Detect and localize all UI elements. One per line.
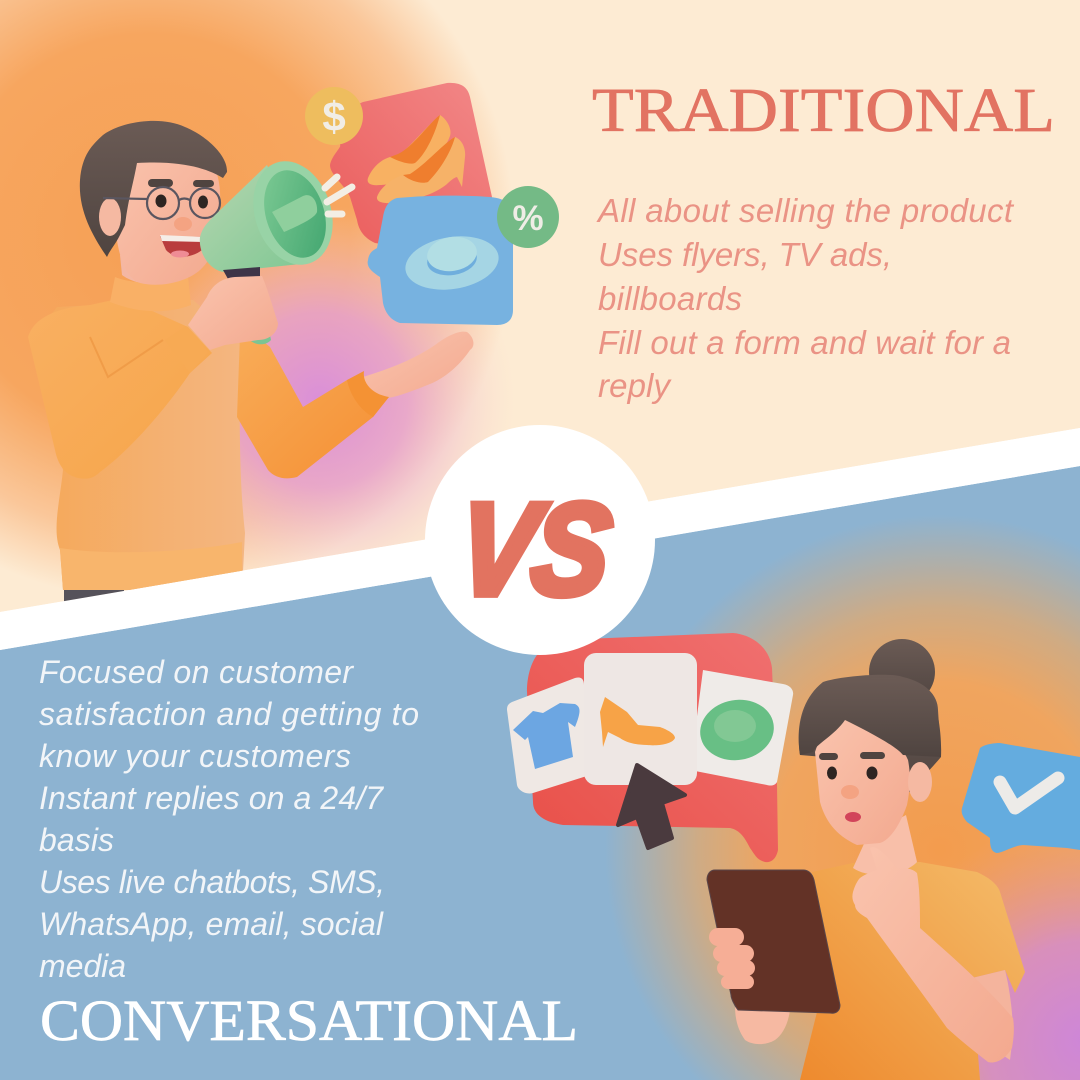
megaphone: handle (251, 336, 271, 344)
icon: blue hat card (368, 196, 513, 325)
man: sweater cuff (165, 326, 208, 373)
text block: traditional points: billboards (598, 280, 742, 317)
icon: cursor arrow (618, 765, 685, 848)
megaphone: rim (254, 161, 333, 265)
icon: orange heel one (368, 115, 451, 185)
woman: ear (908, 762, 932, 802)
icon: green hat (695, 694, 779, 766)
icon: megaphone sound lines (325, 177, 352, 214)
icon: blue check bubble (962, 743, 1080, 853)
text block: conversational points: Instant replies on a 24/7 (39, 780, 384, 816)
woman: eyes (827, 766, 878, 780)
megaphone: inner (264, 170, 326, 258)
megaphone: cone (200, 165, 296, 272)
woman: upper arm (972, 970, 1013, 1060)
man: ear (99, 198, 121, 236)
man: trousers (64, 590, 124, 602)
illustration: woman with tablet (707, 639, 1025, 1080)
diagonal divider band (0, 428, 1080, 650)
icon: hat crown (425, 233, 479, 275)
man: eyes (156, 194, 208, 208)
card: t-shirt (507, 677, 590, 793)
heading: conversational: CONVERSATIONAL (40, 988, 578, 1053)
text block: conversational points (39, 654, 419, 984)
icon: hat band (425, 241, 479, 279)
text block: conversational points: know your customers (39, 738, 351, 774)
text block: conversational points: satisfaction and getting to (39, 696, 419, 732)
woman: hair back (799, 675, 941, 797)
text block: conversational points: Uses live chatbots, SMS, (39, 864, 385, 900)
man: glasses (103, 187, 220, 219)
text block: traditional points: reply (598, 367, 672, 404)
text block: conversational points: Focused on customer (39, 654, 354, 690)
man: sweater hem (60, 542, 242, 590)
text block: traditional points: All about selling the product (596, 192, 1015, 229)
text block: conversational points: basis (39, 822, 114, 858)
man: arm crease (90, 337, 163, 377)
man: collar (110, 277, 191, 311)
icon: percent badge (497, 186, 559, 248)
megaphone: grip collar (223, 267, 260, 279)
icon: blue t-shirt (513, 703, 580, 769)
man: shoulder and left arm (28, 300, 212, 479)
illustration: man with megaphone (28, 121, 473, 610)
card: green hat (690, 670, 793, 786)
woman: fingers on tablet (709, 928, 755, 989)
badge: vs: VS (452, 476, 616, 622)
man: neck (120, 255, 138, 282)
man: open hand (363, 332, 473, 400)
woman: hand and forearm (852, 847, 1014, 1062)
woman: fringe (799, 678, 941, 757)
icon: dollar coin (305, 87, 363, 145)
woman: left forearm (735, 1005, 790, 1044)
panel: traditional background (0, 0, 1080, 620)
icon: orange heel (600, 697, 675, 747)
megaphone: plunger (272, 195, 317, 232)
man: brows (148, 179, 214, 187)
woman: nose (841, 785, 859, 799)
icon: hat brim (402, 230, 502, 296)
text block: traditional points (596, 192, 1015, 404)
icon: white check (1000, 778, 1058, 808)
man: face (117, 162, 220, 285)
man: right arm (237, 335, 388, 478)
woman: face (815, 715, 910, 845)
icon: percent badge: % (512, 199, 544, 238)
text block: traditional points: Fill out a form and wait for a (598, 324, 1011, 361)
man: nose (174, 217, 192, 231)
badge: vs (425, 425, 655, 655)
heading: traditional: TRADITIONAL (592, 77, 1055, 145)
icon: dollar coin: $ (322, 93, 346, 140)
icon: red speech bubble (527, 633, 778, 862)
woman: hair bun (869, 639, 935, 705)
man: hand holding megaphone (188, 276, 278, 350)
icon: orange heel two (377, 137, 465, 203)
woman: neck (853, 815, 917, 875)
tablet (707, 870, 840, 1013)
man: hair (80, 121, 227, 257)
text block: conversational points: media (39, 948, 126, 984)
woman: shirt (800, 862, 1025, 1080)
woman: mouth (845, 812, 861, 822)
woman: brows (819, 752, 885, 760)
text block: conversational points: WhatsApp, email, social (39, 906, 384, 942)
man: mouth (160, 236, 205, 257)
man: sweater torso (56, 308, 245, 590)
card: high heel (584, 653, 697, 785)
panel: conversational background (0, 460, 1080, 1080)
man: right cuff (347, 371, 389, 417)
icon: red shoe card (330, 83, 492, 260)
text block: traditional points: Uses flyers, TV ads, (598, 236, 892, 273)
